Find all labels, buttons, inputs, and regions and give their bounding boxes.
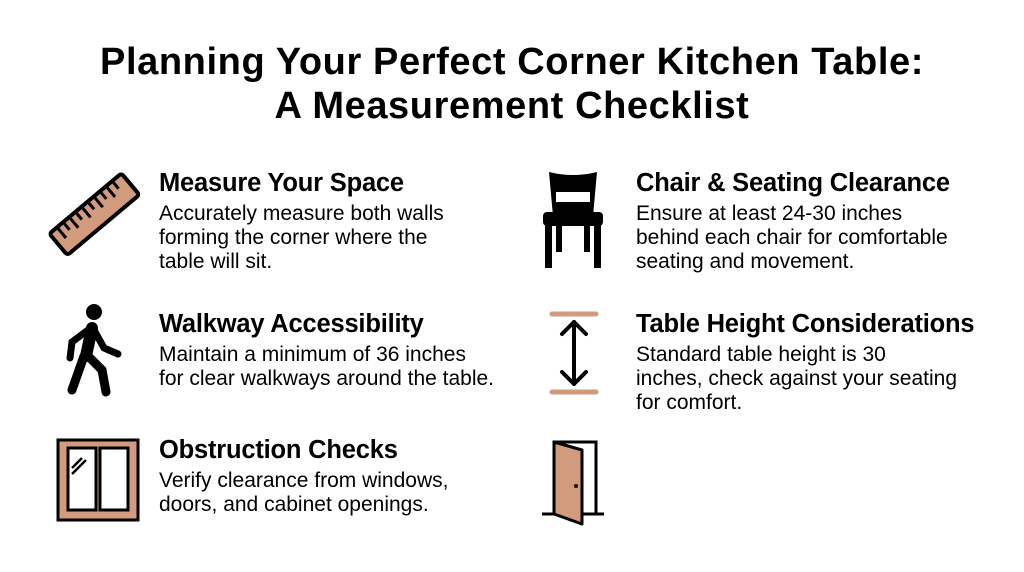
- title: [100, 41, 924, 127]
- item: table height: for comfort.: [636, 391, 742, 414]
- item: walkway accessibility: for clear walkways around the table.: [159, 367, 494, 390]
- icon: window: [56, 438, 140, 522]
- icon: door: [542, 440, 604, 526]
- icon: height arrow: [550, 312, 598, 394]
- item: walkway accessibility: Maintain a minimum of 36 inches: [159, 343, 466, 366]
- icon: walking person: [66, 304, 122, 396]
- item: table height: Table Height Considerations: [636, 310, 974, 338]
- item: table height: [636, 310, 974, 414]
- item: obstruction checks: Obstruction Checks: [159, 436, 398, 464]
- item: walkway accessibility: Walkway Accessibility: [159, 310, 424, 338]
- item: chair & seating clearance: Ensure at least 24-30 inches: [636, 202, 902, 225]
- item: obstruction checks: doors, and cabinet openings.: [159, 493, 429, 516]
- icon: ruler: [48, 172, 140, 256]
- item: measure your space: Measure Your Space: [159, 169, 404, 197]
- item: obstruction checks: Verify clearance from windows,: [159, 469, 448, 492]
- item: measure your space: Accurately measure both walls: [159, 202, 444, 225]
- item: table height: inches, check against your seating: [636, 367, 957, 390]
- item: chair & seating clearance: Chair & Seating Clearance: [636, 169, 950, 197]
- item: table height: Standard table height is 30: [636, 343, 886, 366]
- title: A Measurement Checklist: [275, 85, 749, 127]
- item: measure your space: [159, 169, 444, 273]
- item: measure your space: table will sit.: [159, 250, 272, 273]
- icon: chair: [543, 172, 603, 268]
- item: chair & seating clearance: seating and movement.: [636, 250, 854, 273]
- item: chair & seating clearance: behind each chair for comfortable: [636, 226, 948, 249]
- title: Planning Your Perfect Corner Kitchen Table:: [100, 41, 924, 83]
- item: obstruction checks: [159, 436, 448, 516]
- item: walkway accessibility: [159, 310, 494, 390]
- item: measure your space: forming the corner where the: [159, 226, 427, 249]
- item: chair & seating clearance: [636, 169, 950, 273]
